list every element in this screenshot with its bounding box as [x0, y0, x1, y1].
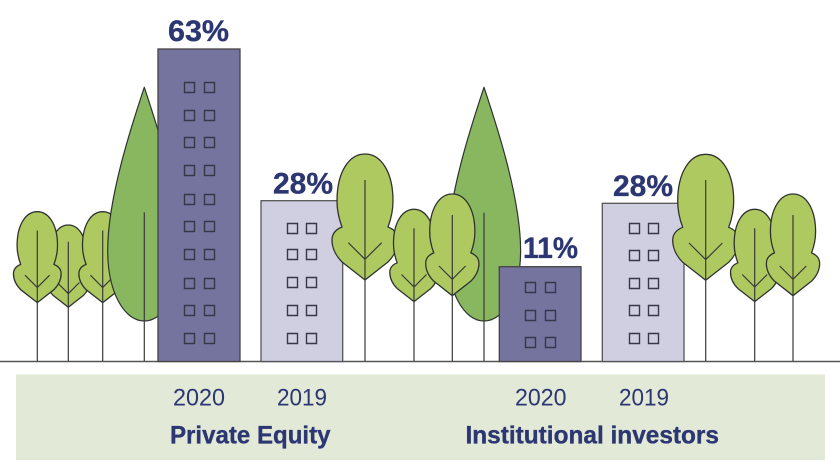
year label: 2019 institutional investors: 2019 — [619, 384, 669, 412]
tree group: left of private equity — [13, 87, 181, 361]
group label: Private Equity: Private Equity — [170, 422, 331, 450]
tree 2 — [47, 225, 90, 361]
tall tree 2 — [447, 87, 521, 361]
legend band — [16, 374, 825, 460]
year label: 2019 private equity: 2019 — [277, 384, 327, 412]
building: Private Equity 2020 — [158, 49, 240, 362]
value: 28% private equity: 28% — [273, 167, 333, 200]
year label: 2020 institutional investors: 2020 — [515, 384, 566, 412]
tall tree 1 — [108, 87, 181, 361]
value: 28% institutional investors: 28% — [613, 170, 673, 203]
tree 7 — [673, 154, 739, 361]
tree 6 — [426, 194, 479, 361]
tree 9 — [766, 194, 820, 361]
building: Private Equity 2019 — [261, 201, 343, 362]
building: Institutional investors 2019 — [602, 203, 684, 362]
tree 4 — [332, 154, 398, 361]
year label: 2020 private equity: 2020 — [173, 384, 225, 412]
tree group: right — [673, 154, 820, 361]
value: 63%: 63% — [168, 15, 229, 48]
tree 8 — [731, 209, 779, 361]
tree 5 — [390, 209, 438, 361]
group label: Institutional investors: Institutional investors — [466, 422, 719, 450]
ground line — [0, 360, 840, 362]
building: Institutional investors 2020 — [499, 267, 581, 362]
tree group: centre — [332, 87, 521, 361]
value: 11%: 11% — [523, 232, 578, 265]
tree 1 — [13, 212, 61, 361]
tree 3 — [79, 212, 127, 361]
